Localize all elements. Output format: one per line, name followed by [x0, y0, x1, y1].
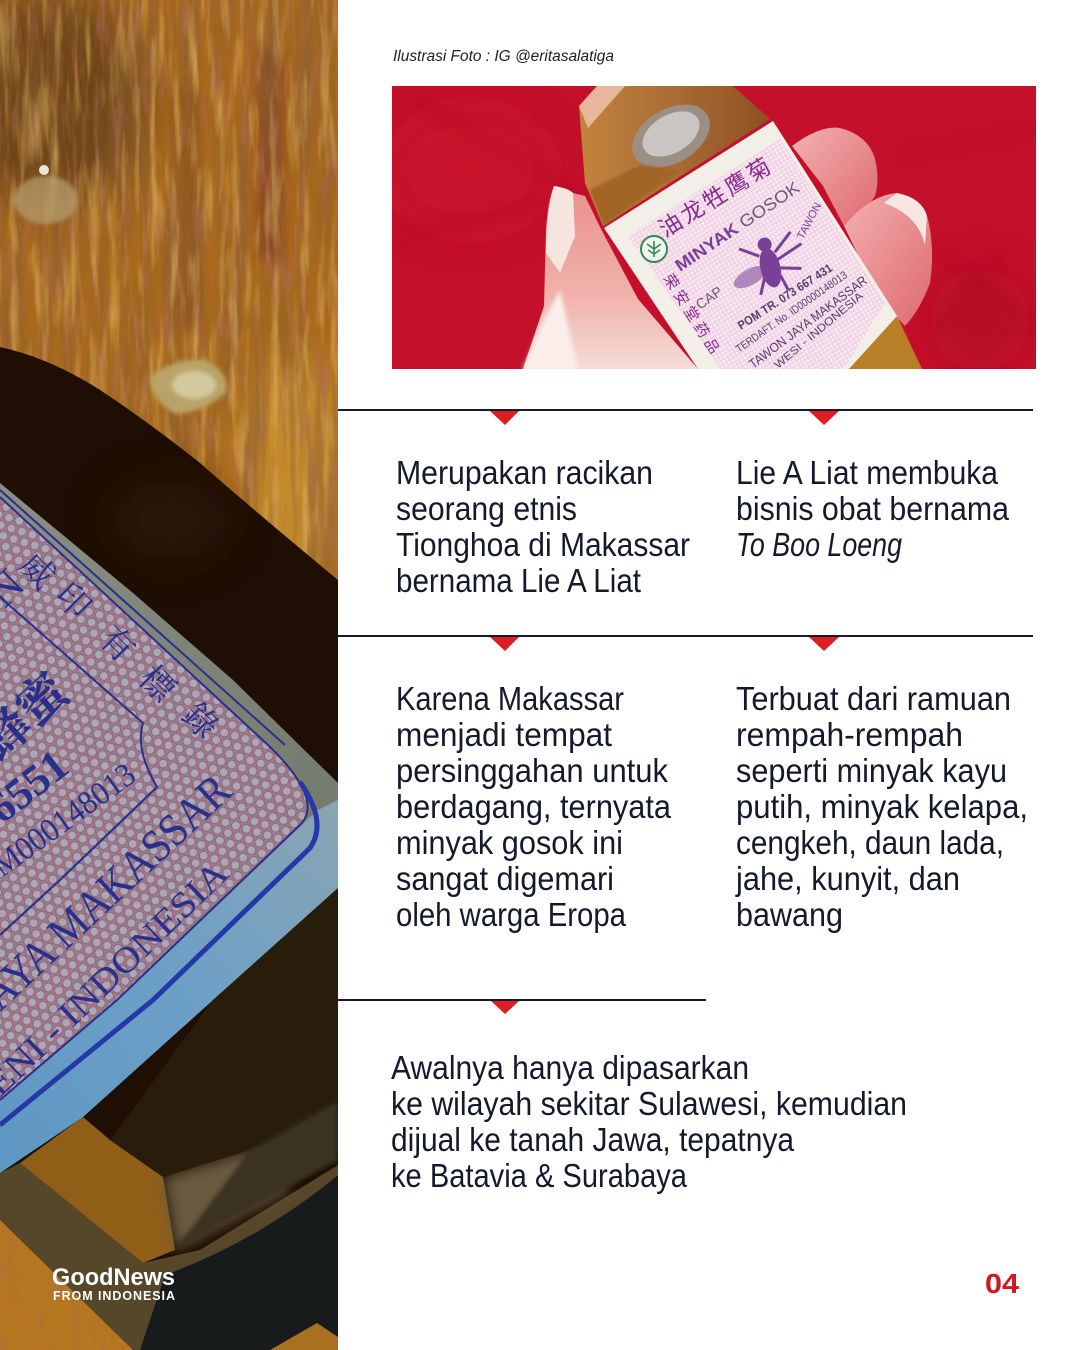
text block: racikan: bernama Lie A Liat: [396, 562, 641, 599]
text block: ramuan: Terbuat dari ramuan: [736, 680, 1011, 717]
brand logo: GoodNews: [52, 1264, 175, 1291]
label: rotated print: 標: [131, 659, 183, 710]
text block: warga Eropa: Karena Makassar: [396, 680, 624, 717]
photo caption: Ilustrasi Foto : IG @eritasalatiga: [393, 48, 614, 65]
label text: [654, 151, 870, 371]
text block: ramuan: seperti minyak kayu: [736, 752, 1007, 789]
text block: bisnis obat: To Boo Loeng: [736, 526, 903, 563]
icon: bee: [734, 231, 802, 296]
text block: racikan: seorang etnis: [396, 490, 577, 527]
divider row 2 with markers: [338, 635, 1033, 651]
text block: warga Eropa: persinggahan untuk: [396, 752, 668, 789]
text block: pemasaran: ke wilayah sekitar Sulawesi, kemudian: [391, 1085, 907, 1122]
label text: CAP: [693, 283, 725, 312]
text block: pemasaran: ke Batavia & Surabaya: [391, 1157, 688, 1194]
brand logo: [52, 1268, 175, 1300]
thumb: [523, 186, 698, 369]
divider row 3 with marker: [338, 999, 706, 1014]
text block: warga Eropa: berdagang, ternyata: [396, 788, 672, 825]
bottle label: [604, 121, 897, 371]
label text: TERDAFT. No. ID00000148013: [734, 269, 850, 355]
label text: TAWON: [795, 201, 824, 241]
wood surface: [0, 0, 338, 580]
label text: POM TR. 073 667 431: [735, 261, 835, 333]
text block: warga Eropa: menjadi tempat: [396, 716, 612, 753]
panel: hand holding bottle photo: [390, 86, 1036, 371]
label rim: [0, 483, 338, 1173]
label text: TAWON JAYA MAKASSAR: [746, 273, 870, 371]
text block: racikan: Tionghoa di Makassar: [396, 526, 690, 563]
text block: warga Eropa: [396, 680, 672, 933]
text block: ramuan: bawang: [736, 896, 843, 933]
text block: bisnis obat: [736, 454, 1010, 563]
wood lower left: [0, 1220, 338, 1350]
fingers: [792, 128, 932, 326]
panel: left bottle photo: [0, 0, 360, 1350]
text block: ramuan: rempah-rempah: [736, 716, 963, 753]
text block: warga Eropa: sangat digemari: [396, 860, 614, 897]
text block: pemasaran: [391, 1049, 907, 1194]
bottle dark glass: [0, 347, 338, 1350]
bottle base: [0, 1163, 338, 1350]
text block: pemasaran: dijual ke tanah Jawa, tepatnya: [391, 1121, 795, 1158]
text block: ramuan: putih, minyak kelapa,: [736, 788, 1028, 825]
label: rotated print: 威: [11, 546, 62, 597]
amber bottle: [579, 86, 922, 369]
page number: 04: [985, 1268, 1019, 1299]
label: rotated print: 錄: [174, 696, 225, 747]
text block: bisnis obat: bisnis obat bernama: [736, 490, 1010, 527]
label: rotated print: [0, 546, 241, 1104]
label text: 油龙牲鹰菊: [654, 151, 778, 242]
wood chips: [14, 165, 227, 414]
text block: bisnis obat: Lie A Liat membuka: [736, 454, 999, 491]
text block: ramuan: cengkeh, daun lada,: [736, 824, 1004, 861]
label text: MINYAK GOSOK: [672, 178, 804, 275]
label text: 荣安堂药品: [660, 271, 724, 361]
label: rotated print: 有: [91, 619, 142, 670]
text block: warga Eropa: oleh warga Eropa: [396, 896, 627, 933]
label text: WESI - INDONESIA: [772, 290, 866, 371]
text block: racikan: [396, 454, 690, 599]
text block: ramuan: jahe, kunyit, dan: [735, 860, 960, 897]
brand logo: FROM INDONESIA: [53, 1289, 175, 1303]
label: rotated print: 印: [47, 576, 98, 627]
text block: ramuan: [735, 680, 1028, 933]
divider row 1 with markers: [338, 409, 1033, 425]
text block: warga Eropa: minyak gosok ini: [396, 824, 623, 861]
red cloth: [390, 86, 1036, 370]
label printed area: [0, 490, 317, 1125]
icon: jamu badge: [641, 236, 667, 262]
text block: racikan: Merupakan racikan: [396, 454, 653, 491]
text block: pemasaran: Awalnya hanya dipasarkan: [391, 1049, 749, 1086]
amber patch under label: [20, 1117, 175, 1263]
